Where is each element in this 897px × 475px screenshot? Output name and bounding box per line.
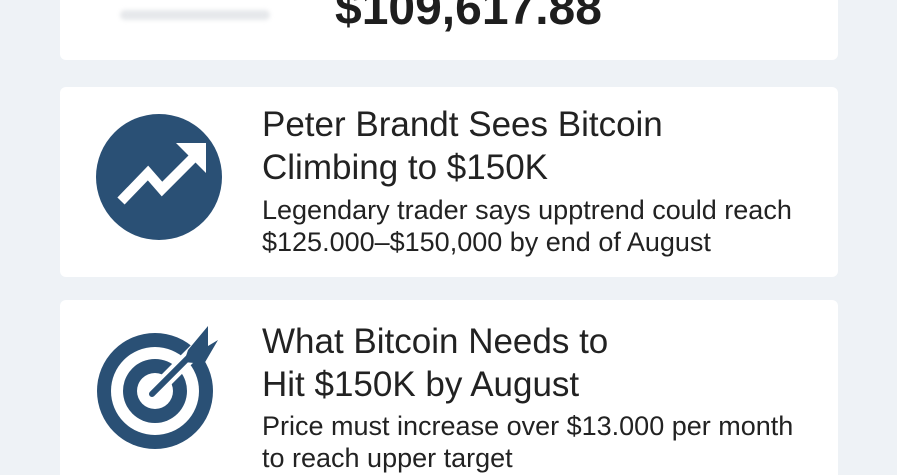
heading: Climbing to $150K bbox=[262, 148, 548, 187]
panel: What Bitcoin needs bbox=[60, 300, 838, 475]
text block: to reach upper target bbox=[262, 443, 513, 473]
heading bbox=[262, 322, 608, 404]
blurred label placeholder bbox=[120, 10, 270, 20]
panel: price card bbox=[60, 0, 838, 60]
text block bbox=[262, 195, 792, 257]
heading bbox=[262, 105, 663, 187]
text block bbox=[262, 411, 793, 473]
icon: trend arrow bbox=[96, 114, 222, 240]
icon: target bbox=[97, 326, 218, 449]
heading: Peter Brandt Sees Bitcoin bbox=[262, 105, 663, 144]
text block: Price must increase over $13.000 per month bbox=[262, 411, 793, 441]
heading: Hit $150K by August bbox=[262, 365, 579, 404]
heading: What Bitcoin Needs to bbox=[262, 322, 608, 361]
text block: $125.000–$150,000 by end of August bbox=[262, 227, 711, 257]
panel: Peter Brandt bbox=[60, 87, 838, 277]
text block: Legendary trader says upptrend could reach bbox=[262, 195, 792, 225]
